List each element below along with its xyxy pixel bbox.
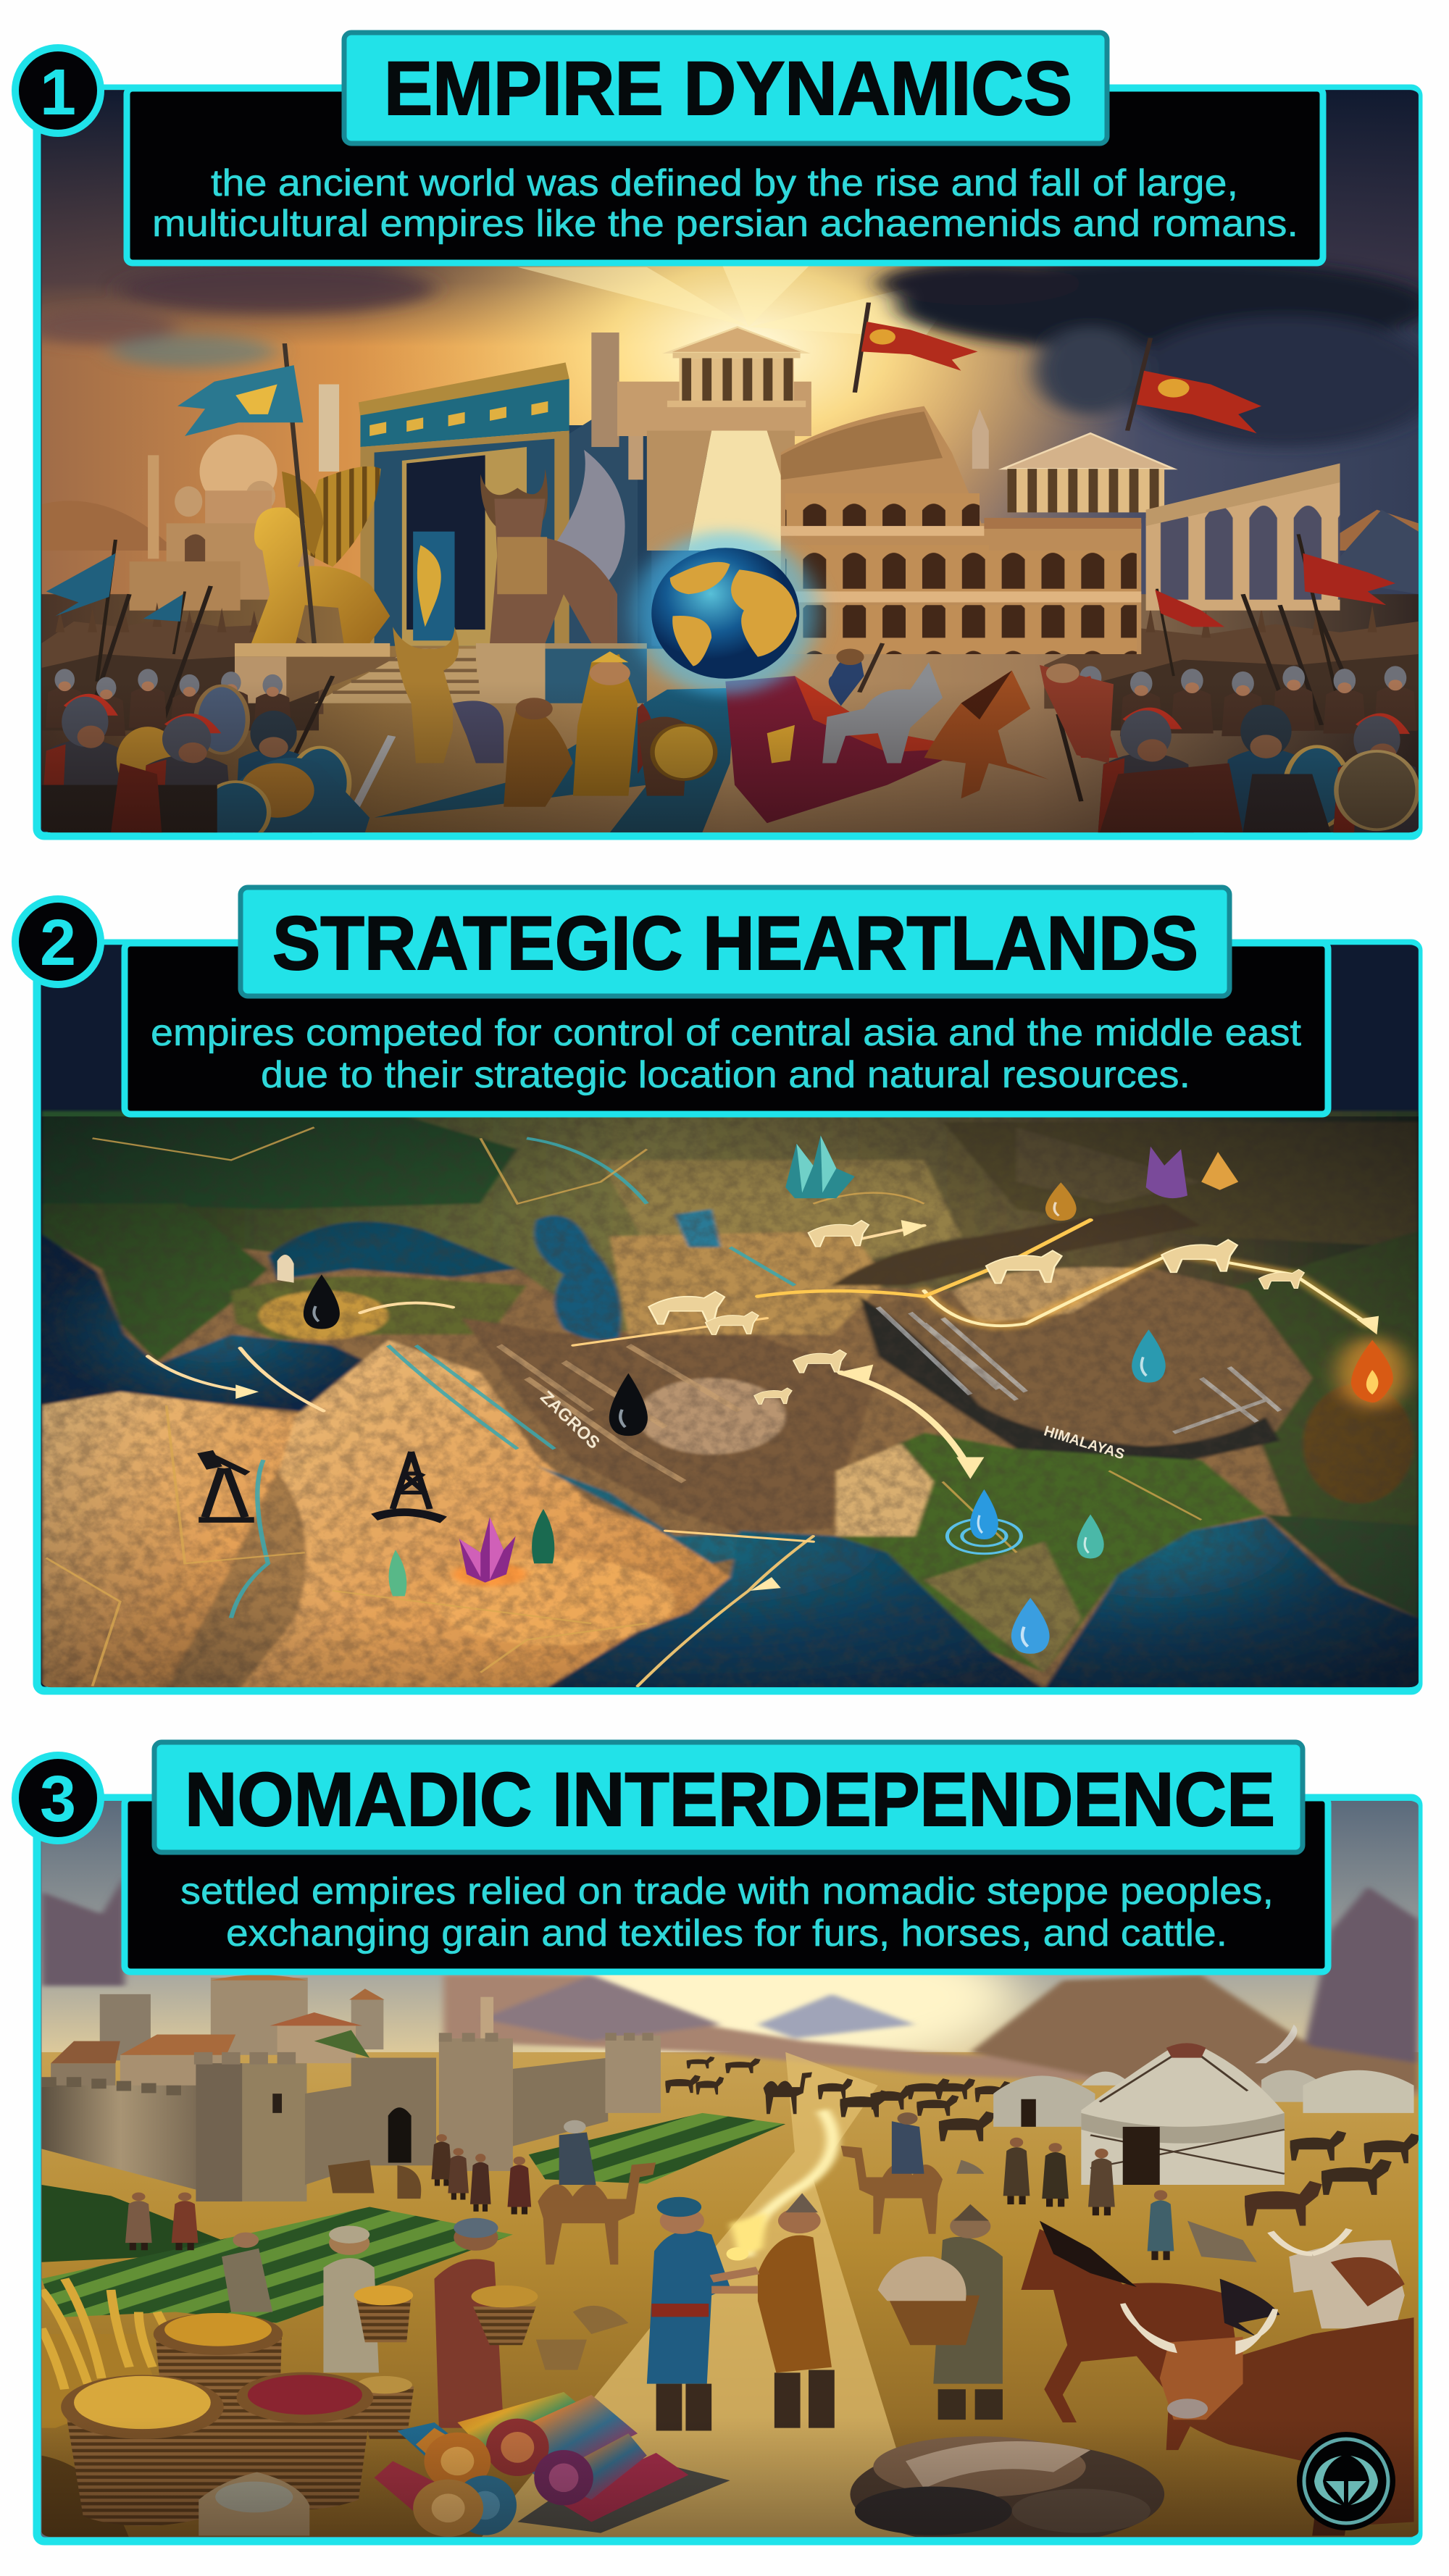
brand logo bbox=[1297, 2432, 1395, 2530]
african desert bbox=[41, 1392, 319, 1689]
number badge 3: 3 bbox=[40, 1763, 76, 1836]
camel with rider, left bbox=[538, 2120, 656, 2265]
description box: due to their strategic location and natural resources. bbox=[261, 1054, 1190, 1096]
grain baskets bbox=[61, 2313, 414, 2526]
mountains bbox=[41, 501, 1419, 551]
caravan animals bbox=[277, 1221, 1304, 1405]
description box bbox=[127, 88, 1323, 263]
market figures far bbox=[125, 2134, 1257, 2370]
mountain labels: ZAGROS bbox=[536, 1387, 604, 1453]
lighthouse tower bbox=[972, 409, 989, 469]
roman temple and aqueduct bbox=[1003, 433, 1340, 611]
panel: empire dynamics bbox=[15, 33, 1442, 846]
yurts bbox=[993, 2025, 1414, 2185]
farmers with baskets bbox=[222, 2218, 538, 2428]
persian gulf bbox=[536, 1465, 739, 1563]
persian gate bbox=[319, 333, 707, 648]
india subcontinent bbox=[836, 1433, 1266, 1673]
merchants exchanging goods bbox=[647, 2193, 835, 2430]
number badge 3 bbox=[15, 1755, 101, 1841]
turkey bbox=[231, 1276, 527, 1340]
icon: oil drop in turkey bbox=[304, 1274, 340, 1329]
golden exchange trail bbox=[748, 2110, 833, 2257]
description box: exchanging grain and textiles for furs, horses, and cattle. bbox=[226, 1912, 1227, 1954]
taklamakan basin bbox=[952, 1267, 1146, 1323]
brown horse bbox=[1021, 2221, 1280, 2450]
steppe ground bbox=[41, 2052, 1419, 2538]
illustration: trade between city and steppe bbox=[41, 1801, 1420, 2547]
golden griffin statue bbox=[235, 467, 406, 703]
spears bbox=[93, 586, 1358, 801]
route arrowheads bbox=[235, 1220, 1379, 1591]
icon: purple crystals bbox=[1146, 1147, 1238, 1198]
golden bull figure bbox=[393, 627, 504, 764]
central warriors bbox=[504, 651, 715, 807]
description box: settled empires relied on trade with nomadic steppe peoples, bbox=[180, 1870, 1274, 1912]
icon: oil pump bbox=[199, 1452, 254, 1520]
glowing trade routes bbox=[148, 1220, 1368, 1686]
glowing globe bbox=[633, 532, 818, 695]
winged bull statue bbox=[476, 450, 647, 703]
description box: the ancient world was defined by the rise and fall of large, bbox=[211, 162, 1238, 204]
stone steps bbox=[314, 648, 480, 703]
longhorn cattle bbox=[1123, 2304, 1414, 2535]
distant herd bbox=[665, 2057, 1420, 2195]
spotted cow bbox=[1271, 2229, 1405, 2328]
classical temple on the hill bbox=[617, 327, 811, 551]
icon: magenta crystals bbox=[453, 1517, 527, 1586]
title banner: STRATEGIC HEARTLANDS bbox=[272, 901, 1198, 986]
soldiers, left bbox=[41, 669, 369, 842]
arabian sea bbox=[546, 1531, 1044, 1689]
distant mountains bbox=[41, 1875, 1419, 2096]
icon: water drop with ripples bbox=[947, 1489, 1021, 1554]
icon: water drop, tibet bbox=[1132, 1329, 1166, 1383]
land and sea shapes bbox=[41, 1111, 1419, 1689]
borders and rivers bbox=[231, 1138, 795, 1618]
number badge 1 bbox=[15, 48, 101, 133]
icon: fire drop bbox=[1337, 1337, 1408, 1408]
northern range bbox=[832, 1204, 1201, 1285]
number badge 1: 1 bbox=[40, 57, 76, 129]
caspian sea bbox=[534, 1216, 621, 1340]
panel: strategic heartlands bbox=[15, 887, 1419, 1691]
icon: oil drop in zagros bbox=[609, 1373, 648, 1436]
number badge 2 bbox=[15, 899, 101, 984]
small herd cattle bbox=[1245, 2181, 1322, 2225]
aral sea bbox=[675, 1209, 721, 1247]
nomad carrying furs bbox=[878, 2204, 1003, 2420]
title banner: NOMADIC INTERDEPENDENCE bbox=[185, 1757, 1275, 1842]
description box bbox=[125, 1798, 1328, 1972]
green crop fields bbox=[41, 2113, 785, 2323]
domed palace bbox=[130, 435, 314, 611]
cavalry horses bbox=[822, 643, 1114, 798]
number badge 2: 2 bbox=[40, 907, 76, 979]
tibet and himalaya ranges bbox=[859, 1269, 1312, 1449]
clouds bbox=[28, 259, 1442, 447]
bay of bengal bbox=[1044, 1517, 1419, 1689]
description box: multicultural empires like the persian achaemenids and romans. bbox=[152, 203, 1298, 245]
icon: oil derrick bbox=[375, 1452, 443, 1520]
panel frame bbox=[37, 943, 1419, 1691]
title banner: EMPIRE DYNAMICS bbox=[384, 46, 1072, 131]
camel with rider, right bbox=[841, 2112, 943, 2234]
ground bbox=[41, 594, 1419, 834]
iran plateau bbox=[462, 1318, 878, 1534]
soldiers, right bbox=[1044, 666, 1421, 846]
icon: pale green gem bbox=[389, 1550, 406, 1596]
wheat bbox=[41, 2279, 171, 2538]
northern lands bbox=[41, 1111, 1419, 1334]
icon: teal crystals bbox=[785, 1136, 855, 1198]
flour sack bbox=[199, 2472, 309, 2535]
capes bbox=[375, 676, 970, 832]
pile of furs bbox=[850, 2436, 1164, 2547]
colosseum bbox=[781, 406, 1141, 654]
flags bbox=[46, 303, 1395, 708]
mediterranean sea bbox=[41, 1234, 388, 1413]
city behind walls bbox=[51, 1975, 493, 2094]
far crowd with spears bbox=[41, 603, 1419, 730]
fortress wall and towers bbox=[41, 2033, 661, 2201]
icon: blue drop bbox=[1011, 1598, 1050, 1654]
icon: green gem bbox=[532, 1509, 554, 1563]
black sea bbox=[268, 1221, 517, 1280]
mountain labels bbox=[536, 1387, 1127, 1463]
china lowlands bbox=[1183, 1231, 1419, 1531]
illustration: map of central asia and the middle east bbox=[41, 945, 1419, 1689]
arabia bbox=[212, 1340, 730, 1689]
description box bbox=[125, 943, 1328, 1114]
icon: amber drop bbox=[1045, 1182, 1077, 1221]
description box: empires competed for control of central asia and the middle east bbox=[151, 1012, 1302, 1054]
rolled textiles bbox=[375, 2392, 730, 2537]
illustration: clash of persian and roman empires bbox=[28, 90, 1442, 846]
mountain labels: HIMALAYAS bbox=[1042, 1423, 1127, 1463]
panel frame bbox=[37, 1798, 1419, 2541]
panel frame bbox=[37, 88, 1419, 836]
panel: nomadic interdependence bbox=[15, 1742, 1420, 2547]
icon: teal drop bbox=[1077, 1515, 1104, 1558]
balkan peninsula bbox=[41, 1204, 268, 1362]
southeast land bbox=[1266, 1515, 1419, 1618]
central asia deserts bbox=[610, 1231, 887, 1334]
